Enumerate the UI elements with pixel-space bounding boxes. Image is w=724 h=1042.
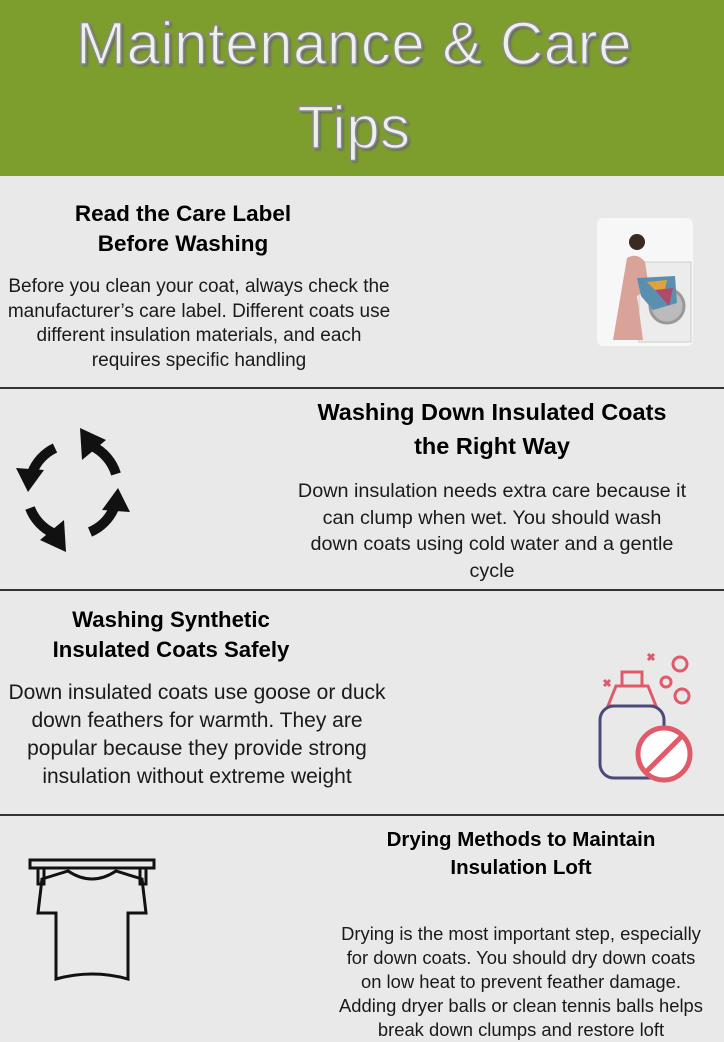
- heading: drying: Insulation Loft: [450, 856, 592, 879]
- text: care label: different insulation materials, and each: [37, 325, 361, 346]
- text: washing down: down coats using cold water and a gentle: [311, 533, 673, 555]
- text: washing down: [298, 480, 686, 582]
- text: care label: Before you clean your coat, always check the: [8, 276, 390, 297]
- panel: care label: [8, 201, 693, 370]
- title: Maintenance & Care: [76, 10, 632, 77]
- heading: washing down: the Right Way: [414, 433, 570, 459]
- icon: shirt on clothesline: [28, 858, 156, 981]
- text: synthetic: popular because they provide strong: [27, 737, 367, 760]
- title: [76, 10, 632, 164]
- heading: synthetic: [53, 607, 290, 662]
- text: synthetic: [8, 681, 386, 788]
- heading: washing down: Washing Down Insulated Coats: [317, 399, 667, 425]
- heading: care label: Before Washing: [98, 231, 268, 256]
- text: washing down: Down insulation needs extra care because it: [298, 480, 686, 502]
- heading: washing down: [317, 399, 667, 459]
- header banner: [0, 0, 724, 176]
- text: care label: manufacturer’s care label. Different coats use: [8, 300, 390, 322]
- heading: drying: Drying Methods to Maintain: [387, 828, 655, 851]
- heading: care label: [75, 201, 291, 256]
- icon: circular arrows: [16, 428, 130, 552]
- text: washing down: cycle: [469, 560, 515, 582]
- panel: drying: [28, 828, 703, 1040]
- icon: woman at washing machine: [597, 218, 693, 346]
- text: drying: on low heat to prevent feather damage.: [361, 971, 681, 992]
- text: synthetic: Down insulated coats use goose or duck: [8, 681, 386, 704]
- text: drying: Adding dryer balls or clean tennis balls helps: [339, 995, 703, 1016]
- heading: care label: Read the Care Label: [75, 201, 291, 226]
- icon: spray bottle with prohibition: [598, 653, 692, 782]
- text: synthetic: insulation without extreme weight: [42, 765, 352, 788]
- text: synthetic: down feathers for warmth. They are: [31, 709, 363, 732]
- text: washing down: can clump when wet. You should wash: [323, 506, 661, 528]
- text: drying: break down clumps and restore loft: [378, 1019, 664, 1040]
- panel: synthetic: [8, 607, 692, 788]
- heading: synthetic: Insulated Coats Safely: [53, 637, 289, 662]
- heading: drying: [387, 828, 655, 879]
- text: drying: Drying is the most important step, especially: [341, 923, 701, 944]
- heading: synthetic: Washing Synthetic: [72, 607, 270, 632]
- panel: washing down: [16, 399, 686, 582]
- text: care label: requires specific handling: [92, 350, 306, 370]
- text: drying: [339, 923, 703, 1040]
- title: Tips: [297, 94, 411, 161]
- text: care label: [8, 276, 390, 370]
- text: drying: for down coats. You should dry down coats: [347, 947, 695, 968]
